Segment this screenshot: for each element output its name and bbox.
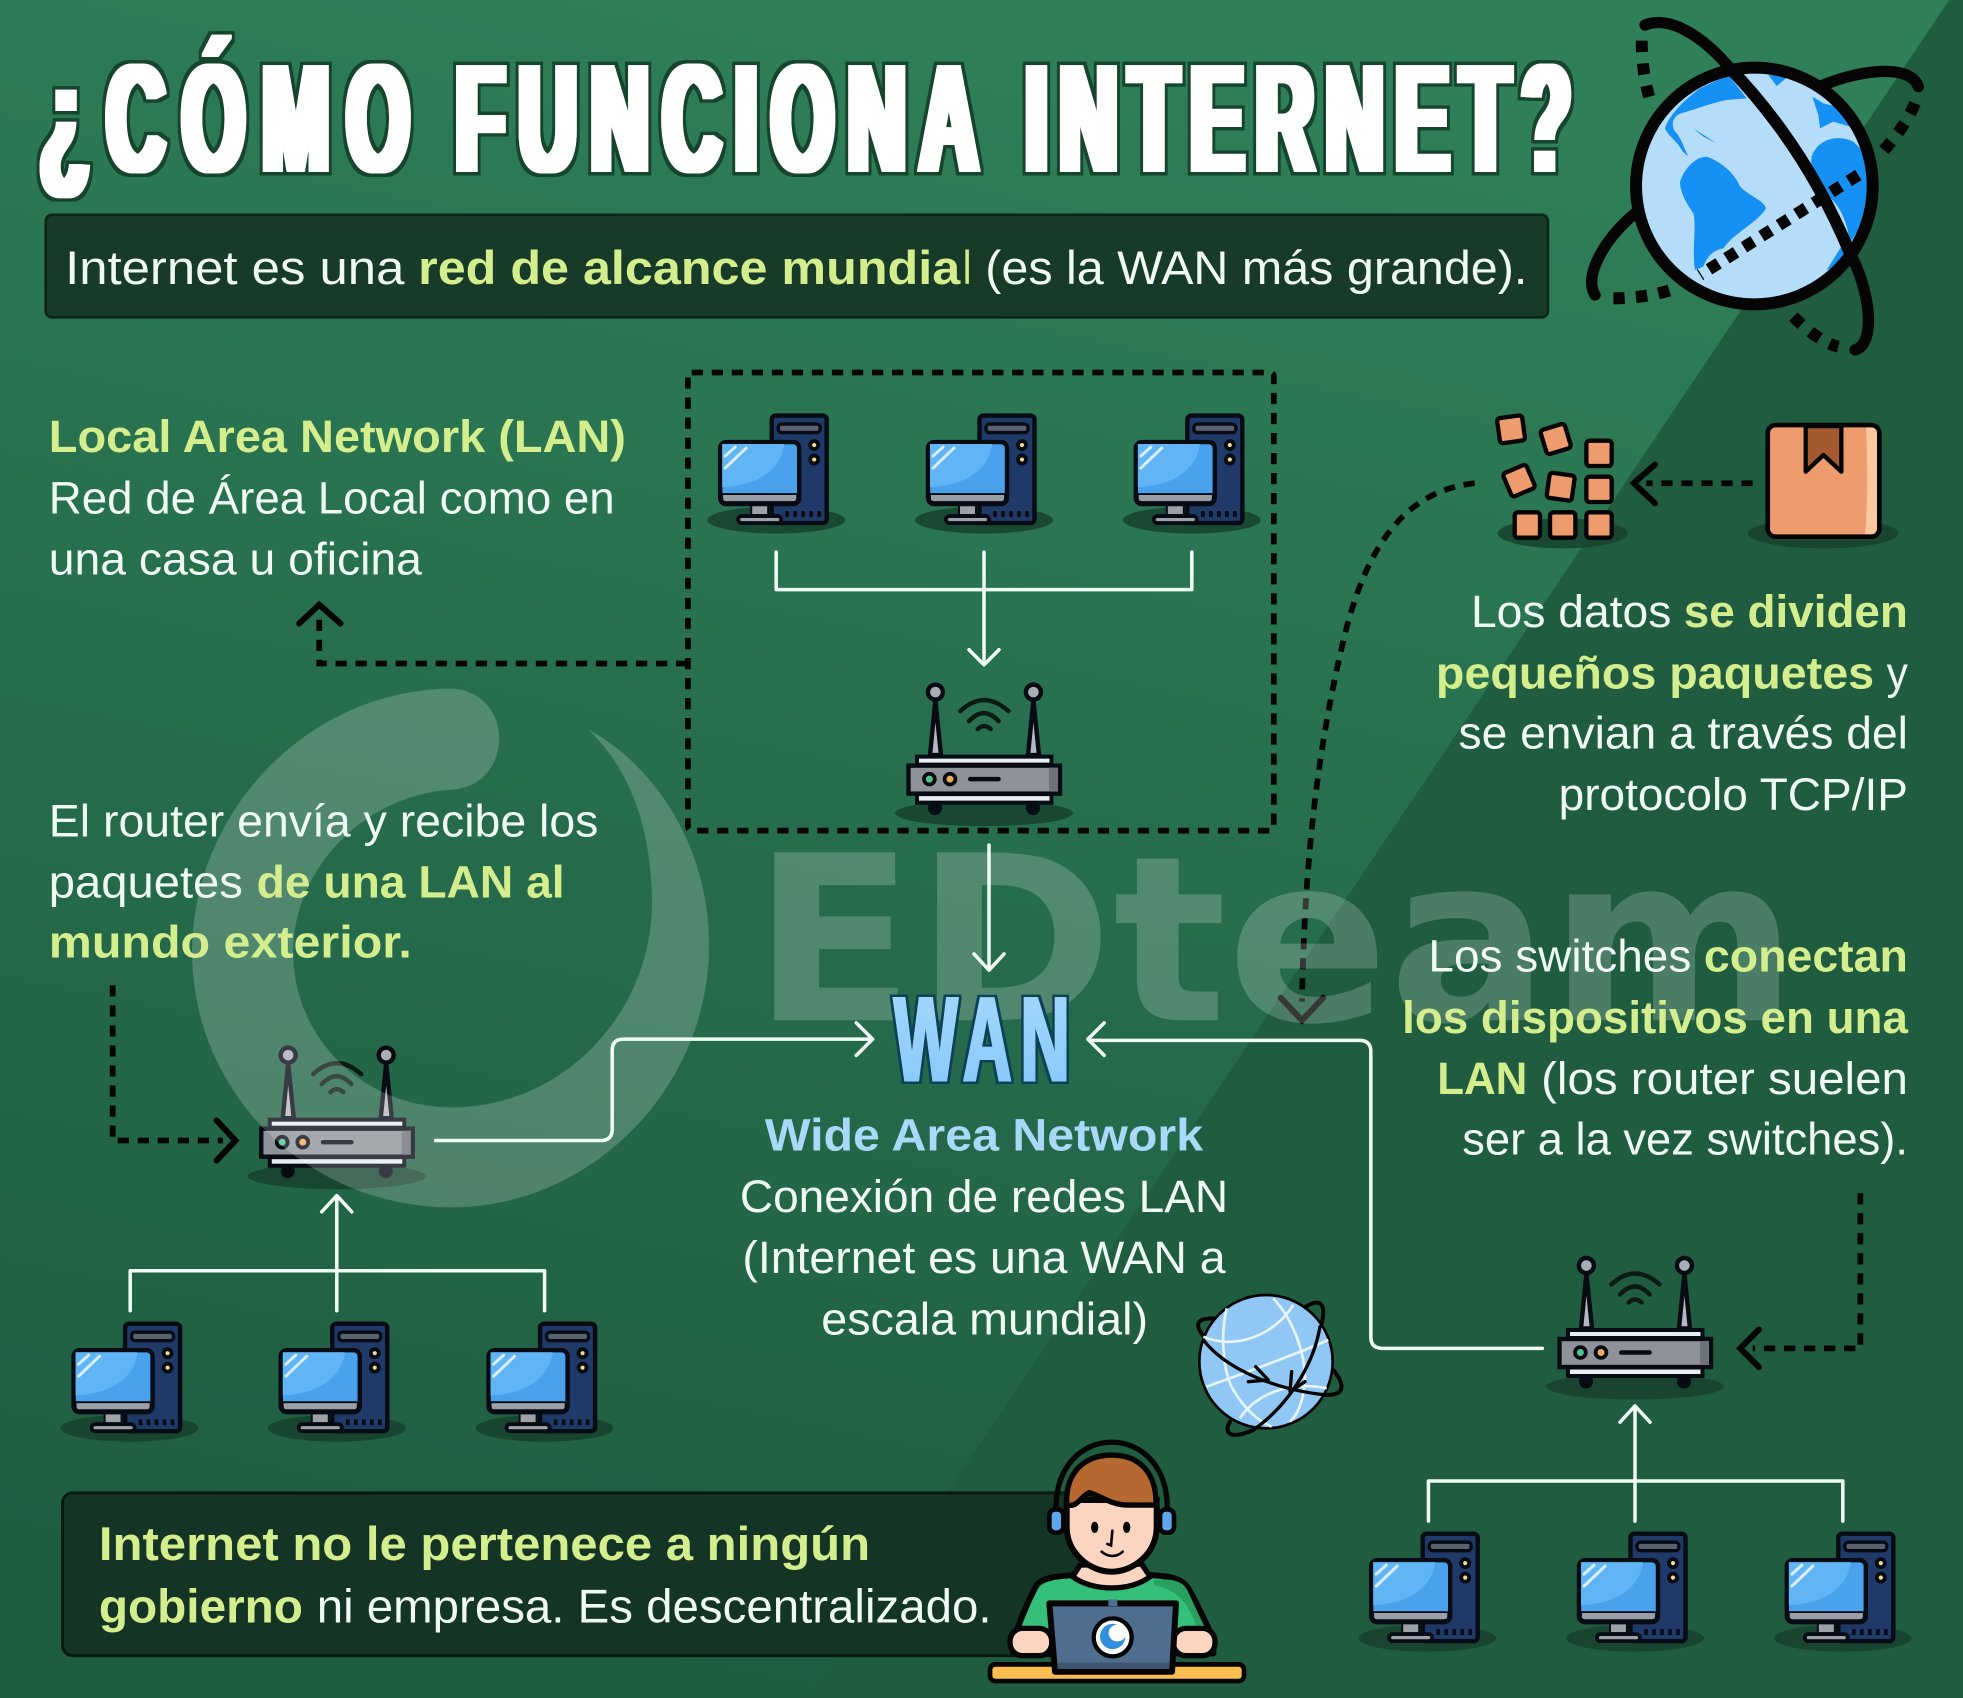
icon: right router: [1546, 1258, 1724, 1400]
text: WAN definition: [740, 1110, 1228, 1345]
connector: LAN computers to router: [776, 552, 1192, 665]
heading: WAN: WAN: [894, 970, 1069, 1108]
icon: person with laptop: [990, 1442, 1244, 1681]
arrow: LAN router to WAN: [974, 845, 1004, 970]
icon: left router: [248, 1048, 426, 1189]
connector: right computers to router: [1428, 1406, 1843, 1521]
callout: decentralized: ni empresa. Es descentralizado.: [317, 1580, 992, 1633]
text: switches explanation: LAN: [1437, 1053, 1527, 1104]
text: router explanation: paquetes: [49, 857, 243, 908]
text: LAN definition: una casa u oficina: [49, 534, 423, 585]
subtitle bar: Internet es una: [65, 242, 405, 295]
text: LAN definition: [49, 411, 626, 585]
arrow: LAN to LAN text: [299, 605, 687, 664]
icon: package box: [1748, 425, 1899, 548]
text: data packets explanation: y: [1887, 648, 1908, 699]
text: WAN definition: Conexión de redes LAN: [740, 1171, 1228, 1222]
text: router explanation: [49, 795, 598, 968]
callout: decentralized: Internet no le pertenece a ningún: [99, 1518, 870, 1571]
text: data packets explanation: se envian a través del: [1458, 708, 1908, 759]
title: INTERNET?: [1025, 34, 1571, 205]
text: switches explanation: (los router suelen: [1541, 1053, 1908, 1104]
text: data packets explanation: se dividen: [1684, 586, 1908, 637]
callout: decentralized: gobierno: [99, 1580, 303, 1633]
icon: small globe: [1198, 1295, 1342, 1435]
text: switches explanation: Los switches: [1428, 930, 1691, 981]
text: LAN definition: Red de Área Local como en: [49, 472, 615, 523]
text: data packets explanation: Los datos: [1471, 586, 1671, 637]
arrow: to right router: [1740, 1193, 1860, 1367]
text: WAN definition: escala mundial): [821, 1294, 1148, 1345]
connector: left computers to router: [130, 1196, 545, 1311]
text: switches explanation: ser a la vez switches).: [1462, 1113, 1908, 1164]
title: FUNCIONA: [456, 34, 978, 205]
text: router explanation: mundo exterior.: [49, 917, 412, 968]
text: router explanation: de una LAN al: [257, 857, 565, 908]
text: data packets explanation: [1436, 586, 1908, 820]
arrow: to left router: [113, 985, 235, 1161]
LAN dotted boundary: [688, 372, 1274, 831]
text: router explanation: El router envía y recibe los: [49, 795, 598, 846]
icon: LAN router: [895, 685, 1073, 826]
text: WAN definition: Wide Area Network: [765, 1110, 1204, 1161]
text: data packets explanation: pequeños paquetes: [1436, 648, 1874, 699]
text: switches explanation: [1402, 930, 1909, 1164]
text: data packets explanation: protocolo TCP/IP: [1559, 769, 1908, 820]
text: switches explanation: conectan: [1704, 930, 1908, 981]
text: WAN definition: (Internet es una WAN a: [742, 1232, 1227, 1283]
arrow: package to small packets: [1634, 464, 1753, 503]
text: switches explanation: los dispositivos en una: [1402, 992, 1909, 1043]
watermark: EDteam logo: EDteam: [752, 807, 1798, 1075]
subtitle bar: [46, 215, 1548, 317]
icon: large globe with orbits: [1592, 23, 1918, 350]
icon: right computers: [1358, 1534, 1912, 1652]
title: ¿CÓMO: [40, 34, 409, 205]
title: [40, 34, 1571, 205]
watermark: EDteam logo: [192, 689, 1798, 1207]
subtitle bar: (es la WAN más grande).: [985, 242, 1527, 295]
icon: small packets: [1497, 415, 1628, 548]
callout: decentralized: [63, 1493, 1108, 1656]
text: LAN definition: Local Area Network (LAN): [49, 411, 626, 462]
arrow: packets to WAN: [1281, 483, 1475, 1020]
arrow: right router to WAN: [1088, 1023, 1542, 1348]
icon: left computers: [61, 1324, 614, 1442]
icon: LAN computers: [707, 416, 1261, 534]
subtitle bar: red de alcance mundia: [418, 242, 961, 295]
subtitle bar: l: [963, 242, 971, 295]
arrow: left router to WAN: [436, 1023, 873, 1141]
